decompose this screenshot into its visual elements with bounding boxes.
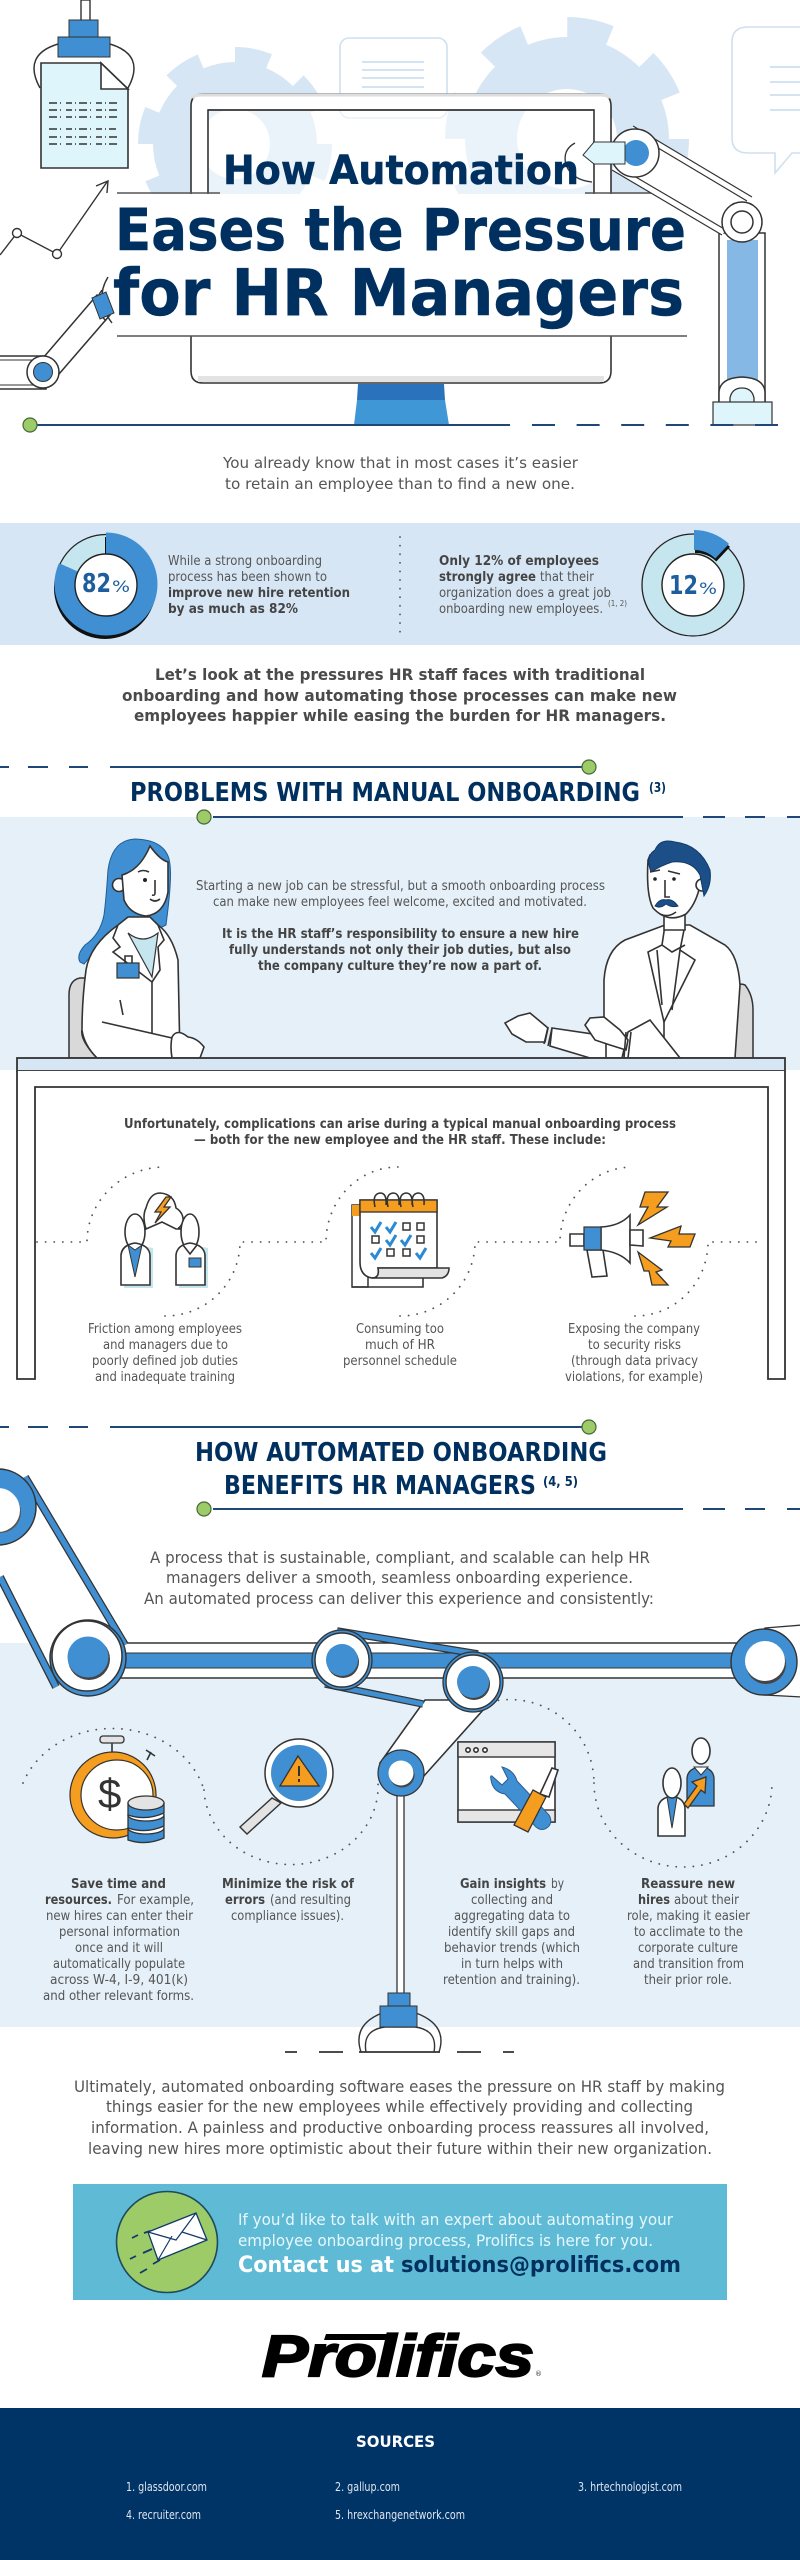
panel: manual onboarding background [0,817,800,1070]
robot arm right [565,126,772,425]
footer: sources: 2. gallup.com [335,2480,400,2494]
benefit: save time: automatically populate [53,1957,185,1972]
stat text: onboarding [439,554,627,617]
divider: below problems heading [197,810,800,824]
text: automated process: An automated process can deliver this experience and consistently: [144,1589,654,1608]
benefit: gain insights: identify skill gaps and [448,1925,575,1940]
conveyor machine [0,1469,800,2052]
benefit: gain insights: aggregating data to [454,1909,570,1924]
caption: schedule: personnel schedule [343,1354,457,1369]
text: automated process [144,1548,654,1608]
divider: header [23,418,790,432]
text: complications intro [124,1117,676,1148]
intro text [222,454,579,493]
title: for HR Managers [113,257,684,331]
benefit: gain insights [443,1877,580,1988]
illustration: man HR manager [505,841,753,1058]
heading: how automated onboarding benefits HR managers: HOW AUTOMATED ONBOARDING [195,1438,607,1468]
stat text: onboarding: onboarding new employees. [439,602,603,617]
caption: schedule: much of HR [365,1338,435,1353]
header illustration background [148,27,800,249]
donut chart: 12% [642,534,744,636]
benefit: save time: across W-4, I-9, 401(k) [50,1973,188,1988]
text: onboarding intro: Starting a new job can be stressful, but a smooth onboarding process [196,879,605,894]
caption: friction: and inadequate training [95,1370,235,1385]
caption: friction: Friction among employees [88,1322,242,1337]
gear: left [148,57,322,231]
intro text: to retain an employee than to find a new one. [225,475,575,493]
panel: statistics [0,523,800,645]
conveyor bar [120,1643,740,1678]
footer: sources [0,2408,800,2560]
rod and claw [359,1750,441,2052]
benefit: save time: personal information [59,1925,180,1940]
benefit: gain insights: behavior trends (which [444,1941,580,1956]
bold intro text: employees happier while easing the burden for HR managers. [134,706,666,725]
stat text: retention: While a strong onboarding [168,554,322,569]
monitor stand [354,384,449,425]
footer: sources: 5. hrexchangenetwork.com [335,2508,465,2522]
icon: stopwatch with coins: $ [98,1770,121,1817]
desk [17,1058,785,1379]
text: automated process: A process that is sustainable, compliant, and scalable can help HR [150,1548,650,1567]
donut chart: 82%: % [112,577,130,596]
heading: how automated onboarding benefits HR managers: (4, 5) [543,1475,578,1490]
line chart arrow [0,181,108,258]
benefit: save time [43,1877,194,2004]
benefit: save time: Save time and [71,1877,166,1892]
benefit: save time: once and it will [75,1941,163,1956]
caption: security: Exposing the company [568,1322,700,1337]
text: conclusion: information. A painless and productive onboarding process reassures all involved, [91,2118,709,2137]
benefit: save time: new hires can enter their [46,1909,194,1924]
footer: sources: 4. recruiter.com [126,2508,201,2522]
text: onboarding intro: can make new employees feel welcome, excited and motivated. [213,895,587,910]
donut chart: 12%: % [699,579,717,598]
benefit: minimize errors: compliance issues). [231,1909,344,1924]
bold intro text: onboarding and how automating those processes can make new [122,686,677,705]
text: complications intro: — both for the new employee and the HR staff. These include: [194,1133,606,1148]
heading: problems with manual onboarding: PROBLEMS WITH MANUAL ONBOARDING [130,778,640,808]
benefit: save time: For example, [117,1893,194,1908]
caption: security: (through data privacy [571,1354,698,1369]
text: conclusion: Ultimately, automated onboarding software eases the pressure on HR staff by making [74,2077,725,2096]
text: conclusion: things easier for the new employees while effectively providing and collecting [106,2097,693,2116]
CTA text: Contact us at [238,2253,394,2278]
stat text: onboarding: organization does a great job [439,586,611,601]
icon: reassuring new hires [658,1738,714,1836]
CTA text: employee onboarding process, Prolifics is here for you. [238,2231,653,2250]
caption: security [565,1322,703,1385]
heading: problems with manual onboarding: (3) [649,781,666,796]
linked rollers [312,1630,503,1777]
benefit: reassure new hires: corporate culture [638,1941,738,1956]
benefit: minimize errors: errors [225,1893,265,1908]
benefit: minimize errors [222,1877,354,1924]
intro text: You already know that in most cases it’s easier [222,454,579,472]
footer: sources: 1. glassdoor.com [126,2480,207,2494]
benefit: gain insights: retention and training). [443,1973,580,1988]
benefit: gain insights: Gain insights [460,1877,546,1892]
text: automated process: managers deliver a smooth, seamless onboarding experience. [166,1568,633,1587]
caption: friction [88,1322,242,1385]
icon: megaphone with warning bolts [570,1192,695,1285]
panel: automated onboarding background [0,1643,800,2027]
benefit: reassure new hires: to acclimate to the [634,1925,743,1940]
footer: sources: 3. hrtechnologist.com [578,2480,682,2494]
donut chart: 12%: 12 [669,571,698,601]
benefit: gain insights: by [551,1877,564,1892]
divider: below benefits heading [197,1502,800,1516]
caption: friction: and managers due to [103,1338,228,1353]
benefit: gain insights: in turn helps with [461,1957,563,1972]
robot arm left [0,277,114,389]
dotted connector: problems [37,1167,762,1316]
divider: above benefits heading [0,1420,596,1434]
illustration: woman HR employee [69,839,204,1058]
text: conclusion: leaving new hires more optimistic about their future within their new organization. [88,2139,712,2158]
logo: Prolifics: Prolifics [262,2324,534,2389]
icon: friction between employees [121,1193,208,1288]
stat text: onboarding: that their [540,570,595,585]
benefit: minimize errors: Minimize the risk of [222,1877,354,1892]
text: onboarding intro [196,879,605,974]
right roller [731,1625,800,1697]
heading: how automated onboarding benefits HR managers: BENEFITS HR MANAGERS [224,1471,536,1501]
belt and left rollers [0,1469,126,1696]
dotted connector: benefits [23,1700,772,1867]
background speech bubble [732,27,800,173]
bold intro text: Let’s look at the pressures HR staff faces with traditional [155,665,645,684]
text: complications intro: Unfortunately, complications can arise during a typical manual onboarding process [124,1117,676,1132]
caption: friction: poorly defined job duties [92,1354,238,1369]
text: onboarding intro: fully understands not only their job duties, but also [229,943,571,958]
crane holding document [34,0,134,168]
benefit: reassure new hires: hires [638,1893,670,1908]
call to action [73,2184,727,2300]
benefit: gain insights: collecting and [471,1893,553,1908]
stat text: retention: improve new hire retention [168,586,350,601]
stat text: onboarding: strongly agree [439,570,536,585]
caption: schedule [343,1322,457,1369]
benefit: minimize errors: (and resulting [270,1893,351,1908]
icon: stopwatch with coins [70,1736,164,1843]
heading: how automated onboarding benefits HR managers [195,1438,607,1501]
donut chart: 82%: 82 [82,569,111,599]
benefit: reassure new hires: Reassure new [641,1877,735,1892]
text: onboarding intro: It is the HR staff’s responsibility to ensure a new hire [222,927,579,942]
logo: Prolifics: ® [535,2370,542,2378]
title band [117,193,687,336]
CTA text: If you’d like to talk with an expert about automating your [238,2210,673,2229]
gear: right [457,29,677,249]
benefit: save time: resources. [45,1893,112,1908]
stat text: retention [168,554,350,617]
title: How Automation [223,148,579,194]
title: Eases the Pressure [115,196,686,264]
CTA text [238,2210,681,2278]
benefit: reassure new hires: role, making it easier [627,1909,751,1924]
caption: schedule: Consuming too [356,1322,444,1337]
stat text: onboarding: (1, 2) [608,599,627,608]
benefit: reassure new hires: their prior role. [644,1973,732,1988]
stat text: onboarding: Only 12% of employees [439,554,599,569]
benefit: reassure new hires: and transition from [633,1957,744,1972]
divider: around claw [285,2051,514,2053]
stat text: retention: by as much as 82% [168,602,298,617]
divider: above problems heading [0,760,596,774]
icon: overloaded calendar [352,1193,449,1287]
benefit: reassure new hires: about their [674,1893,740,1908]
footer: sources: SOURCES [356,2432,435,2451]
stat text: retention: process has been shown to [168,570,327,585]
background document [340,38,447,118]
donut chart: 82% [56,534,156,636]
bold intro text [122,665,677,725]
monitor [191,94,611,425]
title [113,148,686,331]
benefit: save time: and other relevant forms. [43,1989,194,2004]
text: conclusion [74,2077,725,2158]
icon: browser window with tools [458,1742,558,1832]
CTA text: solutions@prolifics.com [401,2253,681,2278]
benefit: reassure new hires [627,1877,751,1988]
text: onboarding intro: the company culture they’re now a part of. [258,959,542,974]
caption: security: to security risks [588,1338,681,1353]
icon: flying envelope [116,2192,218,2292]
icon: magnifying glass with warning [240,1739,333,1834]
caption: security: violations, for example) [565,1370,703,1385]
